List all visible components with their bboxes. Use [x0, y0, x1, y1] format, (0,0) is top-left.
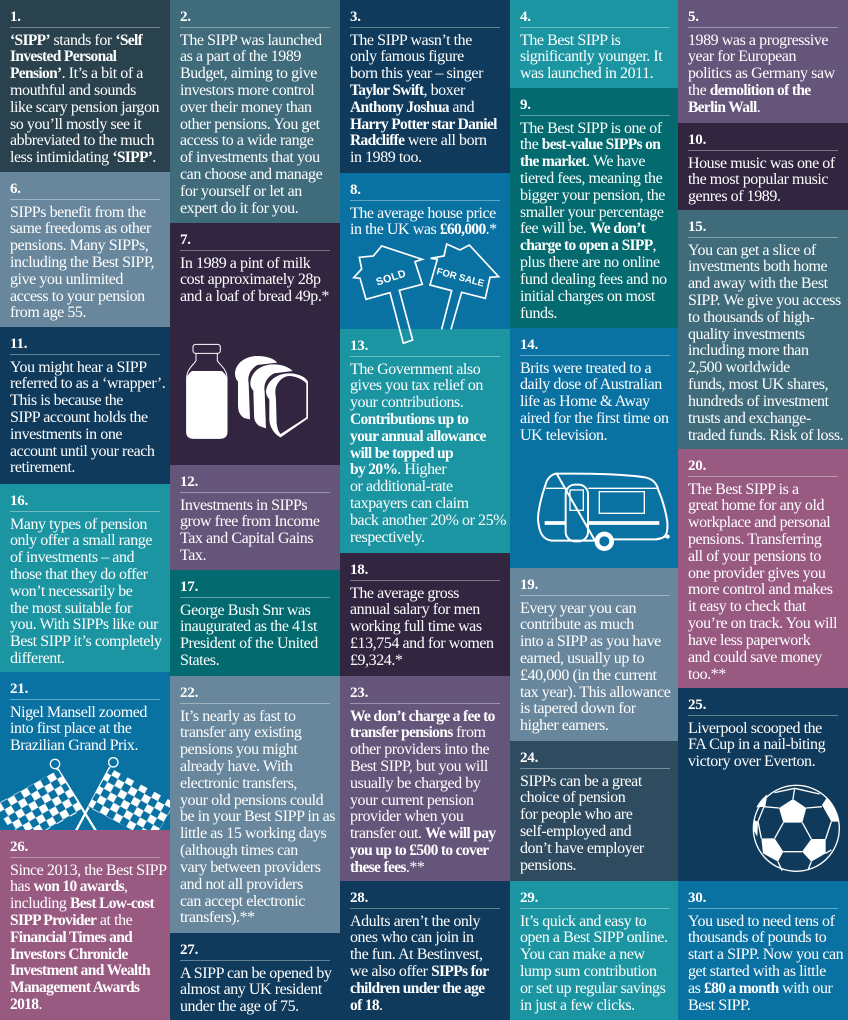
panel 15: investments choice: to thousands of high- [688, 309, 814, 326]
panel 9: best value: The Best SIPP is one of [520, 120, 662, 137]
panel 1: what SIPP stands for: mouthful and sounds [10, 82, 136, 99]
panel 3: born in 1989: Taylor Swift, boxer [350, 82, 465, 99]
panel 22: transfer speed: and not all providers [180, 876, 303, 893]
panel 25: FA Cup [678, 688, 848, 881]
panel 2: launch of the SIPP: investors more control [180, 82, 314, 99]
panel 19: contribution limit: 19. [520, 577, 538, 593]
panel 23: transfer fees: usually be charged by [350, 775, 480, 792]
panel 20: consolidating pensions: 20. [688, 458, 706, 474]
panel 30: start small: thousands of pounds to [688, 929, 826, 946]
panel 6: freedoms: including the Best SIPP, [10, 254, 154, 271]
panel 4: Best SIPP launch: The Best SIPP is [520, 32, 620, 49]
panel 19: contribution limit: higher earners. [520, 717, 608, 734]
panel 2: launch of the SIPP: 2. [180, 9, 191, 25]
panel 28: children: of 18. [350, 997, 383, 1014]
panel 25: FA Cup: 25. [688, 697, 706, 713]
panel 9: best value: fund dealing fees and no [520, 271, 667, 288]
panel 30: start small [678, 881, 848, 1020]
panel 14: Home and Away: Brits were treated to a [520, 360, 651, 377]
panel 22: transfer speed: transfers).** [180, 909, 255, 926]
panel 29: quick to open: It’s quick and easy to [520, 913, 646, 930]
panel 23: transfer fees: your current pension [350, 792, 474, 809]
panel 14: Home and Away: UK television. [520, 427, 607, 444]
panel 21: Nigel Mansell: Brazilian Grand Prix. [10, 737, 138, 754]
panel 8: house price: The average house price [350, 205, 496, 222]
panel 7: milk and bread prices: and a loaf of bread 49p.* [180, 288, 329, 305]
panel 27: who can open: A SIPP can be opened by [180, 965, 332, 982]
panel 28: children: ones who can join in [350, 929, 474, 946]
panel 5: Berlin Wall: the demolition of the [688, 82, 811, 99]
panel 28: children: Adults aren’t the only [350, 913, 480, 930]
panel 20: consolidating pensions: all of your pensions to [688, 548, 821, 565]
panel 8: house price: 8. [350, 182, 361, 198]
panel 19: contribution limit [510, 568, 678, 741]
panel 24: self-employed: SIPPs can be a great [520, 773, 642, 790]
icon: caravan [538, 474, 670, 549]
panel 4: Best SIPP launch [510, 0, 678, 88]
panel 16: range of investments: those that they do offer [10, 566, 148, 583]
panel 26: awards: 26. [10, 839, 28, 855]
icon layer [0, 242, 840, 872]
panel 29: quick to open: lump sum contribution [520, 963, 657, 980]
panel 27: who can open: almost any UK resident [180, 981, 322, 998]
panel 3: born in 1989: The SIPP wasn’t the [350, 32, 472, 49]
panel 17: George Bush: inaugurated as the 41st [180, 618, 317, 635]
panel 29: quick to open: 29. [520, 890, 538, 906]
panel 9: best value: the market. We have [520, 153, 645, 170]
panel 11: wrapper: SIPP account holds the [10, 409, 148, 426]
panel 23: transfer fees: other providers into the [350, 741, 489, 758]
panel 1: what SIPP stands for: less intimidating ‘SIPP’. [10, 149, 156, 166]
panel 19: contribution limit: contribute as much [520, 616, 634, 633]
panel 16: range of investments: 16. [10, 493, 28, 509]
icon: milk bottle [186, 344, 227, 438]
panel 7: milk and bread prices: cost approximately 28p [180, 271, 321, 288]
icon: for sale sign: FOR SALE [435, 266, 486, 290]
panel 15: investments choice: trusts and exchange- [688, 410, 811, 427]
panel 22: transfer speed: little as 15 working days [180, 825, 326, 842]
panel 12: tax free growth: grow free from Income [180, 513, 320, 530]
panel 18: average salary: £13,754 and for women [350, 635, 494, 652]
panel 11: wrapper: This is because the [10, 392, 123, 409]
panel 3: born in 1989: Anthony Joshua and [350, 99, 474, 116]
panel 26: awards: 2018. [10, 996, 42, 1013]
panel 11: wrapper: investments in one [10, 426, 122, 443]
panel 15: investments choice: traded funds. Risk of loss. [688, 427, 843, 444]
panel 25: FA Cup: victory over Everton. [688, 753, 815, 770]
panel 23: transfer fees: you up to £500 to cover [350, 842, 489, 859]
panel 12: tax free growth: 12. [180, 474, 198, 490]
panel 20: consolidating pensions: one provider gives you [688, 565, 825, 582]
panel 6: freedoms: same freedoms as other [10, 220, 151, 237]
panel 20: consolidating pensions: you’re on track. You will [688, 615, 837, 632]
panel 15: investments choice: investments both home [688, 258, 827, 275]
panel 3: born in 1989: 3. [350, 9, 361, 25]
panel 23: transfer fees [340, 676, 510, 881]
panel 16: range of investments: of investments – and [10, 549, 134, 566]
panel 10: house music: 10. [688, 132, 706, 148]
panel 10: house music: genres of 1989. [688, 188, 780, 205]
panel 13: tax relief: or additional-rate [350, 478, 453, 495]
panel 24: self-employed: don’t have employer [520, 840, 644, 857]
panel 20: consolidating pensions: have less paperwork [688, 632, 810, 649]
panel 20: consolidating pensions [678, 449, 848, 688]
panel 25: FA Cup: Liverpool scooped the [688, 720, 822, 737]
panel 13: tax relief: taxpayers can claim [350, 495, 469, 512]
panel 13: tax relief: will be topped up [350, 445, 453, 462]
panel 30: start small: You used to need tens of [688, 913, 834, 930]
panel 23: transfer fees: transfer pensions from [350, 724, 486, 741]
panel 5: Berlin Wall: 5. [688, 9, 699, 25]
panel 27: who can open: under the age of 75. [180, 998, 299, 1015]
panel 2: launch of the SIPP: Budget, aiming to give [180, 65, 317, 82]
panel 6: freedoms: access to your pension [10, 288, 145, 305]
panel 30: start small: get started with as little [688, 963, 826, 980]
panel 5: Berlin Wall: year for European [688, 48, 796, 65]
panel 13: tax relief: 13. [350, 338, 368, 354]
panel 2: launch of the SIPP: The SIPP was launched [180, 32, 322, 49]
panel 18: average salary: working full time was [350, 618, 482, 635]
panel 19: contribution limit: into a SIPP as you have [520, 633, 661, 650]
panel 26: awards: Investment and Wealth [10, 962, 150, 979]
panel 22: transfer speed: can accept electronic [180, 893, 305, 910]
panel 18: average salary: £9,324.* [350, 652, 402, 669]
panel 16: range of investments: different. [10, 650, 64, 667]
panel 9: best value: bigger your pension, the [520, 187, 665, 204]
panel 27: who can open: 27. [180, 942, 198, 958]
panel 11: wrapper: retirement. [10, 459, 75, 476]
panel 26: awards [0, 830, 170, 1020]
panel 2: launch of the SIPP: other pensions. You get [180, 116, 320, 133]
panel 6: freedoms: pensions. Many SIPPs, [10, 237, 148, 254]
panel 19: contribution limit: £40,000 (in the current [520, 667, 657, 684]
panel 22: transfer speed: (although times can [180, 842, 298, 859]
panel 23: transfer fees: these fees.** [350, 859, 424, 876]
panel 1: what SIPP stands for: like scary pension jargon [10, 99, 159, 116]
panel 24: self-employed: for people who are [520, 806, 632, 823]
panel 23: transfer fees: 23. [350, 685, 368, 701]
panel 20: consolidating pensions: pensions. Transferring [688, 531, 821, 548]
panel 20: consolidating pensions: more control and makes [688, 581, 832, 598]
panel 4: Best SIPP launch: 4. [520, 9, 531, 25]
panel 28: children [340, 881, 510, 1020]
panel 10: house music: House music was one of [688, 155, 835, 172]
panel 16: range of investments: you. With SIPPs like our [10, 616, 158, 633]
panel 13: tax relief [340, 329, 510, 553]
panel 1: what SIPP stands for: Pension’. It’s a bit of a [10, 65, 143, 82]
panel 22: transfer speed: vary between providers [180, 859, 320, 876]
panel 14: Home and Away: life as Home & Away [520, 393, 650, 410]
panel 21: Nigel Mansell: 21. [10, 681, 28, 697]
panel 16: range of investments: won’t necessarily be [10, 583, 132, 600]
panel 2: launch of the SIPP: can choose and manage [180, 166, 322, 183]
panel 18: average salary: 18. [350, 562, 368, 578]
panel 7: milk and bread prices: 7. [180, 232, 191, 248]
panel 24: self-employed: self-employed and [520, 823, 631, 840]
panel 9: best value: funds. [520, 305, 557, 322]
panel 15: investments choice: You can get a slice of [688, 242, 816, 259]
panel 3: born in 1989: Radcliffe were all born [350, 132, 487, 149]
panel 13: tax relief: The Government also [350, 361, 480, 378]
panel 11: wrapper: account until your reach [10, 443, 154, 460]
panel 12: tax free growth [170, 465, 340, 570]
panel 23: transfer fees: provider when you [350, 808, 463, 825]
panel 22: transfer speed: 22. [180, 685, 198, 701]
icon: loaf of bread slices [235, 356, 308, 437]
panel 14: Home and Away: daily dose of Australian [520, 376, 662, 393]
panel 24: self-employed: choice of pension [520, 789, 625, 806]
panel 23: transfer fees: Best SIPP, but you will [350, 758, 488, 775]
panel 16: range of investments: only offer a small range [10, 532, 152, 549]
panel 9: best value: plus there are no online [520, 254, 660, 271]
panel 26: awards: Since 2013, the Best SIPP [10, 862, 167, 879]
panel 6: freedoms: give you unlimited [10, 271, 123, 288]
panel 17: George Bush [170, 570, 340, 676]
panel 22: transfer speed: electronic transfers, [180, 775, 297, 792]
panel 20: consolidating pensions: The Best SIPP is a [688, 481, 799, 498]
panel 22: transfer speed: It’s nearly as fast to [180, 708, 296, 725]
panel 2: launch of the SIPP: over their money than [180, 99, 312, 116]
panel 15: investments choice: hundreds of investment [688, 393, 829, 410]
panel 2: launch of the SIPP [170, 0, 340, 223]
panel 9: best value: charge to open a SIPP, [520, 237, 656, 254]
panel 29: quick to open: You can make a new [520, 946, 645, 963]
panel 22: transfer speed: be in your Best SIPP in as [180, 808, 335, 825]
icon: for sale sign [430, 244, 499, 329]
panel 22: transfer speed: pensions you might [180, 741, 297, 758]
panel 30: start small: 30. [688, 890, 706, 906]
panel 13: tax relief: by 20%. Higher [350, 461, 446, 478]
panel 14: Home and Away [510, 328, 678, 568]
panel 3: born in 1989 [340, 0, 510, 173]
panel 15: investments choice: SIPP. We give you access [688, 292, 841, 309]
panel 25: FA Cup: FA Cup in a nail-biting [688, 736, 825, 753]
panel 13: tax relief: your annual allowance [350, 428, 486, 445]
panel 6: freedoms: SIPPs benefit from the [10, 204, 146, 221]
panel 6: freedoms: from age 55. [10, 304, 86, 321]
panel 16: range of investments: the most suitable for [10, 600, 132, 617]
panel 2: launch of the SIPP: for yourself or let an [180, 183, 302, 200]
panel 22: transfer speed: transfer any existing [180, 724, 301, 741]
panel 8: house price [340, 173, 510, 329]
panel 26: awards: Investors Chronicle [10, 946, 128, 963]
panel 17: George Bush: 17. [180, 579, 198, 595]
panel 29: quick to open: open a Best SIPP online. [520, 929, 668, 946]
panel 18: average salary [340, 553, 510, 676]
panel 3: born in 1989: Harry Potter star Daniel [350, 116, 497, 133]
panel 24: self-employed: pensions. [520, 857, 576, 874]
panel 20: consolidating pensions: great home for any old [688, 497, 824, 514]
panel 15: investments choice [678, 210, 848, 449]
panel 11: wrapper [0, 327, 170, 484]
panel 28: children: we also offer SIPPs for [350, 963, 488, 980]
panel 9: best value: tiered fees, meaning the [520, 170, 662, 187]
panel 2: launch of the SIPP: as a part of the 1989 [180, 48, 301, 65]
panel 30: start small: start a SIPP. Now you can [688, 946, 843, 963]
panel 4: Best SIPP launch: significantly younger. It [520, 48, 662, 65]
panel 15: investments choice: 15. [688, 219, 706, 235]
panel 6: freedoms [0, 172, 170, 327]
panel 29: quick to open [510, 881, 678, 1020]
panel 3: born in 1989: only famous figure [350, 48, 464, 65]
panel 13: tax relief: gives you tax relief on [350, 377, 483, 394]
panel 9: best value: the best-value SIPPs on [520, 136, 660, 153]
panel 1: what SIPP stands for: abbreviated to the much [10, 132, 154, 149]
icon: sold sign: SOLD [375, 268, 408, 289]
panel 23: transfer fees: We don’t charge a fee to [350, 708, 495, 725]
panel 17: George Bush: President of the United [180, 635, 318, 652]
panel 16: range of investments: Many types of pension [10, 516, 147, 533]
panel 15: investments choice: 2,500 worldwide [688, 359, 790, 376]
panel 20: consolidating pensions: too.** [688, 666, 726, 683]
panel 23: transfer fees: transfer out. We will pay [350, 825, 495, 842]
panel 26: awards: has won 10 awards, [10, 878, 128, 895]
panel 22: transfer speed: your old pensions could [180, 792, 323, 809]
panel 1: what SIPP stands for: Invested Personal [10, 48, 116, 65]
panel 24: self-employed [510, 741, 678, 881]
panel 13: tax relief: your contributions. [350, 394, 463, 411]
panel 19: contribution limit: is tapered down for [520, 700, 636, 717]
panel 28: children: the fun. At Bestinvest, [350, 946, 483, 963]
panel 12: tax free growth: Tax and Capital Gains [180, 530, 313, 547]
panel 21: Nigel Mansell: Nigel Mansell zoomed [10, 704, 147, 721]
panel 28: children: children under the age [350, 980, 484, 997]
panel 13: tax relief: Contributions up to [350, 411, 468, 428]
panel 5: Berlin Wall: politics as Germany saw [688, 65, 835, 82]
panel 5: Berlin Wall: 1989 was a progressive [688, 32, 828, 49]
panel 11: wrapper: referred to as a ‘wrapper’. [10, 375, 165, 392]
icon: chequered flags [0, 757, 170, 830]
panel 16: range of investments: Best SIPP it’s completely [10, 633, 162, 650]
panel 17: George Bush: George Bush Snr was [180, 602, 310, 619]
panel 10: house music: the most popular music [688, 171, 828, 188]
panel 9: best value [510, 88, 678, 328]
panel 26: awards: Management Awards [10, 979, 139, 996]
panel 7: milk and bread prices [170, 223, 340, 465]
panel 29: quick to open: in just a few clicks. [520, 997, 635, 1014]
panel 26: awards: including Best Low-cost [10, 895, 154, 912]
panel 2: launch of the SIPP: expert do it for you. [180, 200, 298, 217]
panel 26: awards: SIPP Provider at the [10, 912, 132, 929]
panel 14: Home and Away: aired for the first time on [520, 410, 669, 427]
panel 19: contribution limit: tax year). This allowance [520, 684, 670, 701]
panel 24: self-employed: 24. [520, 750, 538, 766]
panel 9: best value: 9. [520, 97, 531, 113]
panel 9: best value: fee will be. We don’t [520, 220, 645, 237]
panel 1: what SIPP stands for: 1. [10, 9, 21, 25]
panel 3: born in 1989: born this year – singer [350, 65, 483, 82]
panel 22: transfer speed: already have. With [180, 758, 292, 775]
panel 5: Berlin Wall [678, 0, 848, 123]
panel 28: children: 28. [350, 890, 368, 906]
panel 14: Home and Away: 14. [520, 337, 538, 353]
panel 17: George Bush: States. [180, 652, 219, 669]
panel 16: range of investments [0, 484, 170, 672]
panel 13: tax relief: back another 20% or 25% [350, 512, 506, 529]
panel 15: investments choice: and away with the Best [688, 275, 828, 292]
panel 13: tax relief: respectively. [350, 529, 425, 546]
panel 20: consolidating pensions: it easy to check that [688, 598, 806, 615]
panel 8: house price: in the UK was £60,000.* [350, 221, 497, 238]
panel 10: house music [678, 123, 848, 210]
panel 30: start small: as £80 a month with our [688, 980, 832, 997]
panel 20: consolidating pensions: and could save money [688, 649, 822, 666]
panel 21: Nigel Mansell: into first place at the [10, 720, 131, 737]
icon: sold sign [354, 246, 422, 343]
panel 19: contribution limit: Every year you can [520, 600, 636, 617]
panel 18: average salary: annual salary for men [350, 601, 480, 618]
panel 27: who can open [170, 933, 340, 1020]
panel 21: Nigel Mansell [0, 672, 170, 830]
panel 6: freedoms: 6. [10, 181, 21, 197]
panel 22: transfer speed [170, 676, 340, 933]
panel 5: Berlin Wall: Berlin Wall. [688, 99, 760, 116]
panel 9: best value: initial charges on most [520, 288, 655, 305]
panel 30: start small: Best SIPP. [688, 997, 750, 1014]
panel 26: awards: Financial Times and [10, 929, 132, 946]
panel 1: what SIPP stands for [0, 0, 170, 172]
panel 7: milk and bread prices: In 1989 a pint of milk [180, 255, 310, 272]
panel 19: contribution limit: earned, usually up to [520, 650, 644, 667]
panel 15: investments choice: quality investments [688, 326, 805, 343]
panel 18: average salary: The average gross [350, 585, 459, 602]
panel 15: investments choice: funds, most UK shares, [688, 376, 828, 393]
panel 12: tax free growth: Tax. [180, 547, 206, 564]
panel 15: investments choice: including more than [688, 342, 808, 359]
panel 4: Best SIPP launch: was launched in 2011. [520, 65, 653, 82]
panel 3: born in 1989: in 1989 too. [350, 149, 422, 166]
panel 12: tax free growth: Investments in SIPPs [180, 497, 307, 514]
panel 2: launch of the SIPP: access to a wide range [180, 132, 313, 149]
panel 9: best value: smaller your percentage [520, 204, 664, 221]
panel 2: launch of the SIPP: of investments that you [180, 149, 320, 166]
panel 1: what SIPP stands for: ‘SIPP’ stands for ‘Self [10, 32, 142, 49]
panel 11: wrapper: 11. [10, 336, 27, 352]
icon: football [753, 785, 839, 871]
panel 11: wrapper: You might hear a SIPP [10, 359, 147, 376]
panel 1: what SIPP stands for: so you’ll mostly see it [10, 116, 141, 133]
panel 20: consolidating pensions: workplace and personal [688, 514, 830, 531]
panel 29: quick to open: or set up regular savings [520, 980, 665, 997]
